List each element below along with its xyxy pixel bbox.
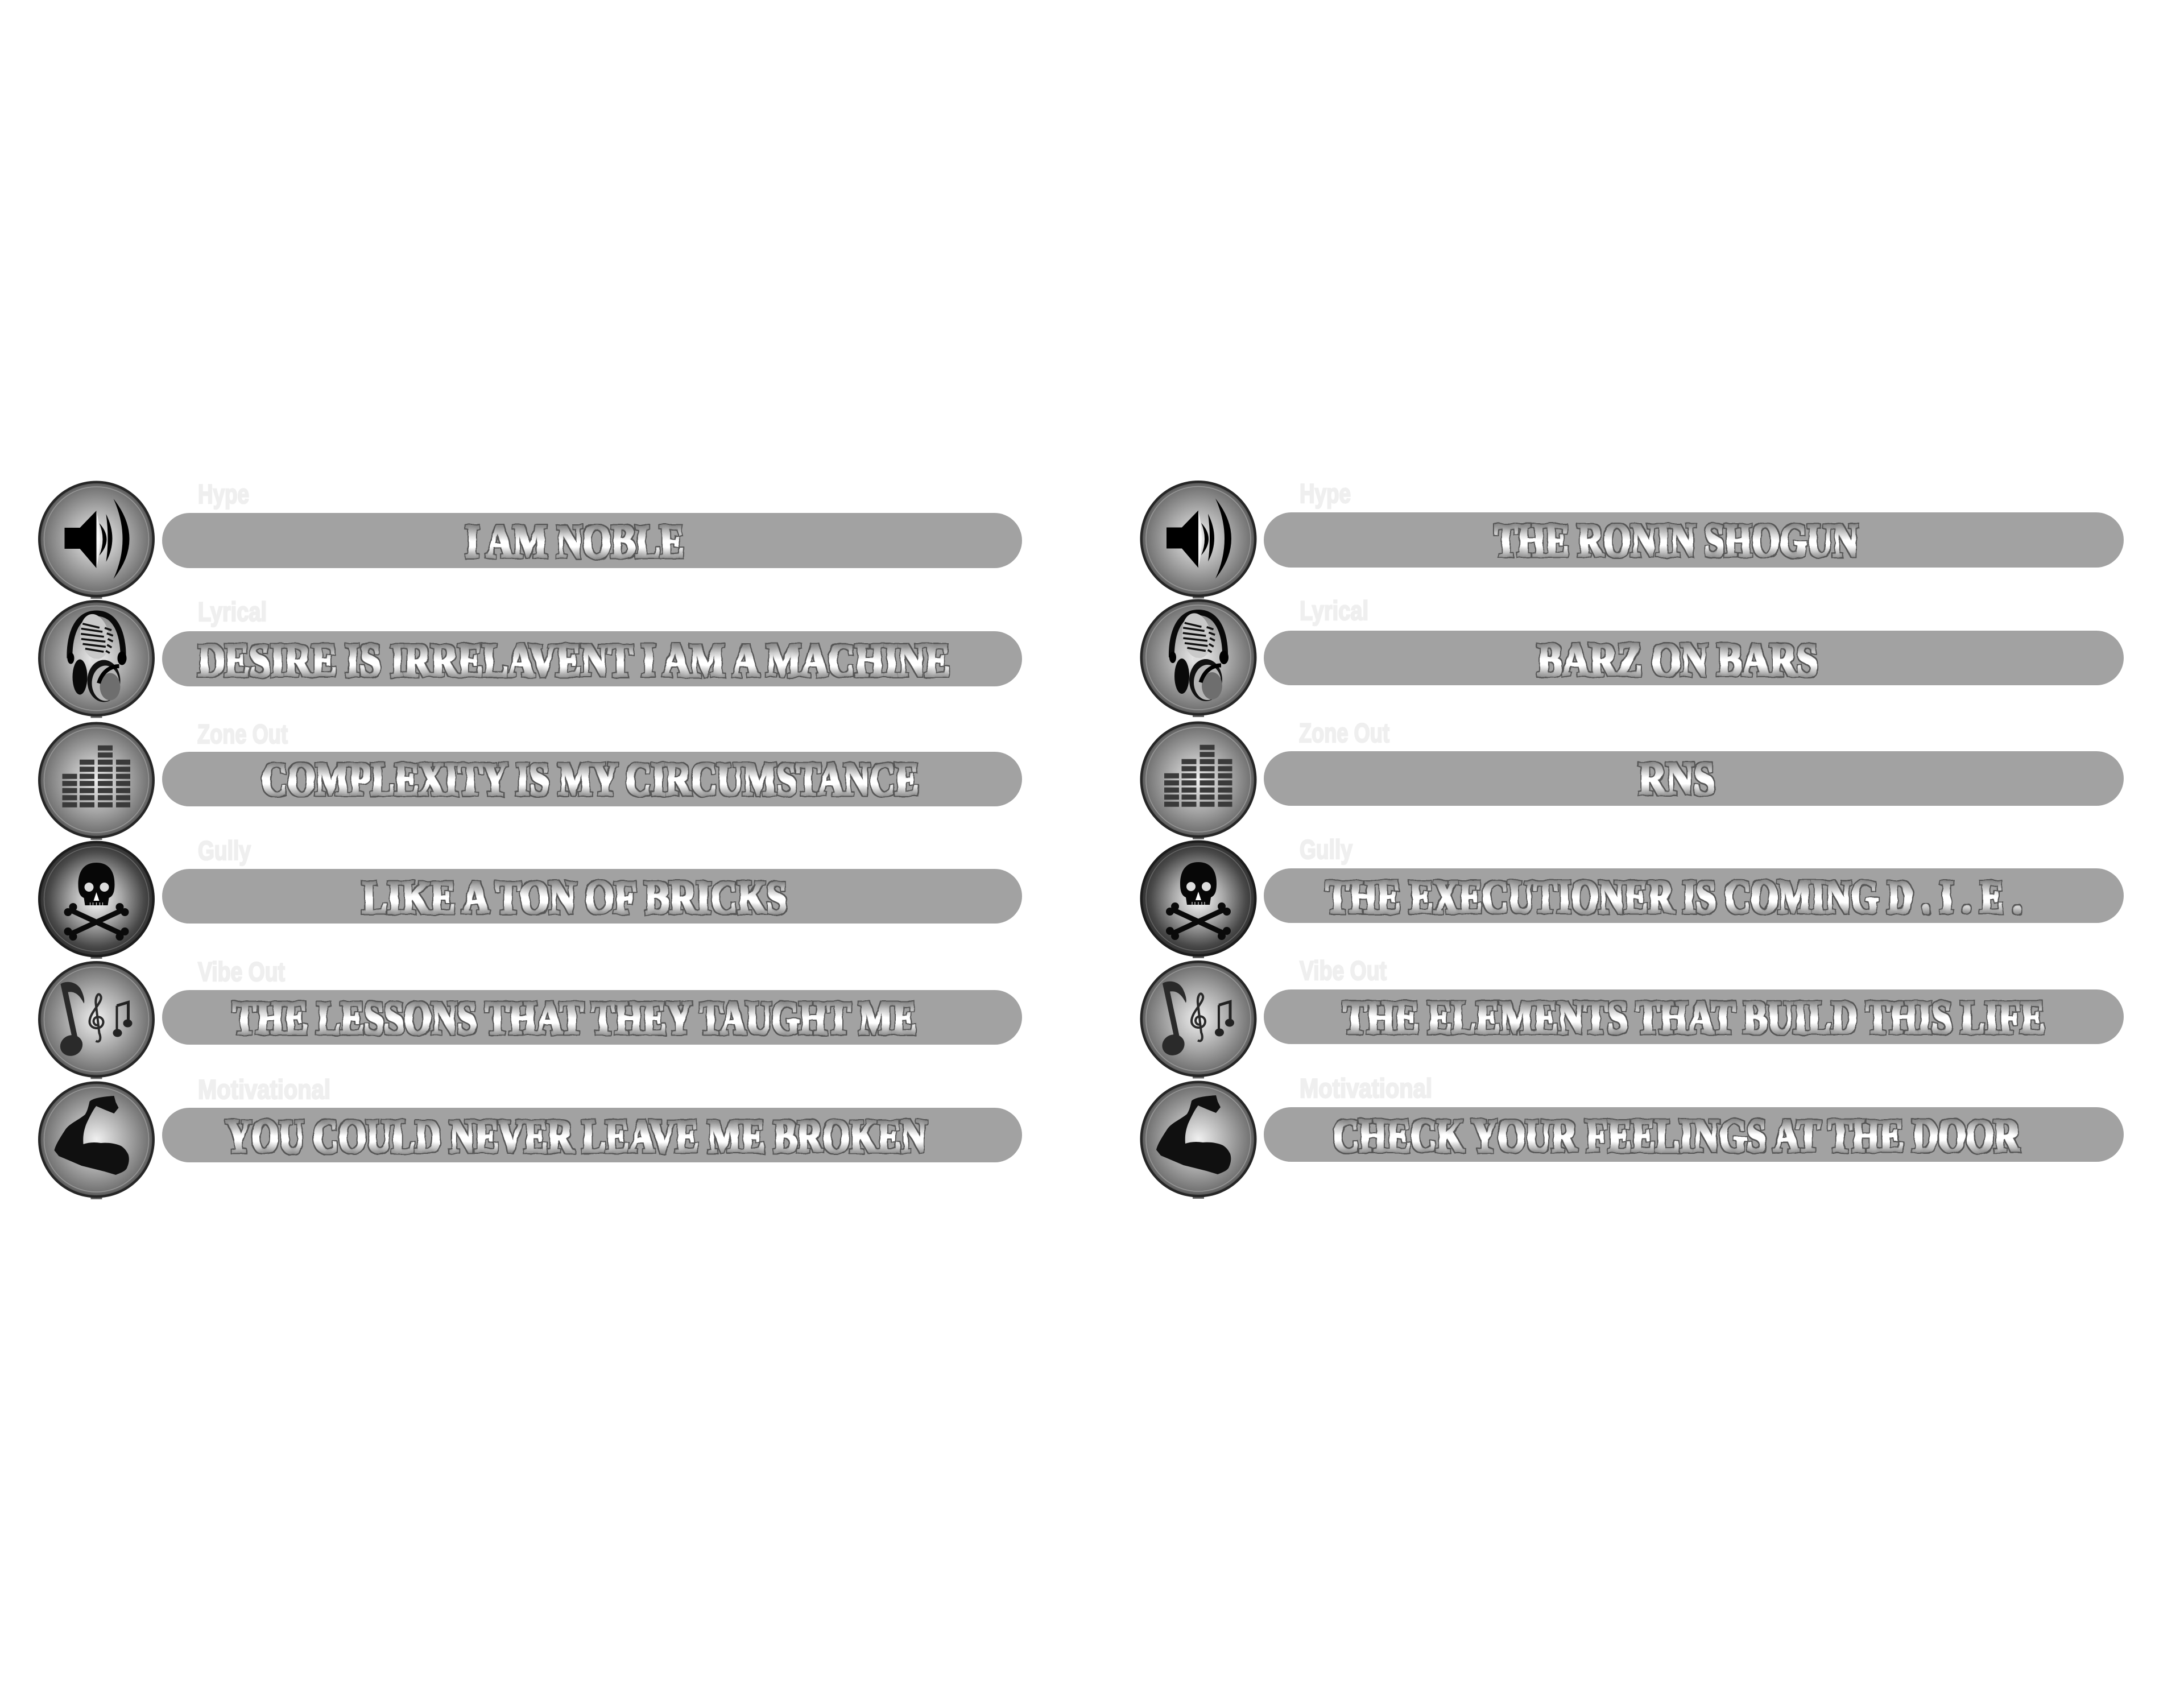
genre label: Gully: Gully	[1300, 834, 1352, 864]
row: Motivational, Feelings	[1140, 1073, 2124, 1199]
icon: music notes	[38, 961, 155, 1079]
track title: I AM NOBLE	[465, 515, 684, 568]
track bar	[162, 1108, 1022, 1162]
icon: skull and crossbones	[38, 840, 155, 959]
track bar	[162, 869, 1022, 924]
track bar	[162, 631, 1022, 686]
icon: microphone and headphones	[38, 600, 155, 718]
row: Vibe Out, Lessons	[38, 956, 1022, 1079]
genre label: Gully: Gully	[198, 835, 251, 866]
track title: DESIRE IS IRRELAVENT I AM A MACHINE	[198, 634, 950, 687]
genre label: Vibe Out: Vibe Out	[198, 956, 285, 987]
row: Zone Out, Complexity	[38, 719, 1022, 840]
icon: speaker	[38, 481, 155, 599]
icon: equalizer	[38, 722, 155, 840]
track bar	[162, 513, 1022, 568]
track bar	[162, 752, 1022, 806]
track title: COMPLEXITY IS MY CIRCUMSTANCE	[262, 753, 919, 806]
track bar	[1264, 631, 2124, 685]
panel: left track list	[38, 479, 1022, 1199]
icon: music notes	[1140, 960, 1257, 1078]
genre label: Motivational: Motivational	[1300, 1073, 1432, 1103]
track title: BARZ ON BARS	[1537, 633, 1818, 686]
genre label: Vibe Out: Vibe Out	[1300, 955, 1387, 985]
row: Lyrical, Desire	[38, 597, 1022, 718]
track bar	[1264, 512, 2124, 568]
track bar	[1264, 868, 2124, 923]
genre label: Motivational: Motivational	[198, 1074, 330, 1104]
row: Vibe Out, Elements	[1140, 955, 2124, 1078]
track title: YOU COULD NEVER LEAVE ME BROKEN	[226, 1110, 926, 1163]
row: Hype, Ronin Shogun	[1140, 478, 2124, 598]
row: Hype, I Am Noble	[38, 479, 1022, 599]
row: Gully, Ton of Bricks	[38, 835, 1022, 959]
track bar	[1264, 751, 2124, 806]
genre label: Zone Out: Zone Out	[1299, 718, 1389, 748]
track bar	[1264, 989, 2124, 1044]
row: Motivational, Broken	[38, 1074, 1022, 1199]
row: Zone Out, RNS	[1140, 718, 2124, 839]
row: Gully, Executioner	[1140, 834, 2124, 958]
track title: THE LESSONS THAT THEY TAUGHT ME	[233, 992, 916, 1045]
track bar	[162, 990, 1022, 1045]
genre label: Hype: Hype	[1300, 478, 1351, 508]
genre label: Zone Out: Zone Out	[197, 719, 288, 749]
icon: flexed arm	[1140, 1080, 1257, 1199]
genre label: Lyrical: Lyrical	[1300, 595, 1368, 626]
track title: LIKE A TON OF BRICKS	[362, 871, 787, 924]
track title: RNS	[1639, 752, 1715, 805]
icon: speaker	[1140, 481, 1257, 598]
icon: skull and crossbones	[1140, 840, 1257, 958]
panel: right track list	[1140, 478, 2124, 1199]
icon: flexed arm	[38, 1082, 155, 1199]
track bar	[1264, 1107, 2124, 1162]
icon: equalizer	[1140, 721, 1257, 839]
genre label: Lyrical: Lyrical	[198, 597, 267, 627]
genre label: Hype: Hype	[198, 479, 249, 509]
track title: THE RONIN SHOGUN	[1494, 514, 1858, 567]
row: Lyrical, Barz on Bars	[1140, 595, 2124, 717]
icon: microphone and headphones	[1140, 599, 1257, 717]
